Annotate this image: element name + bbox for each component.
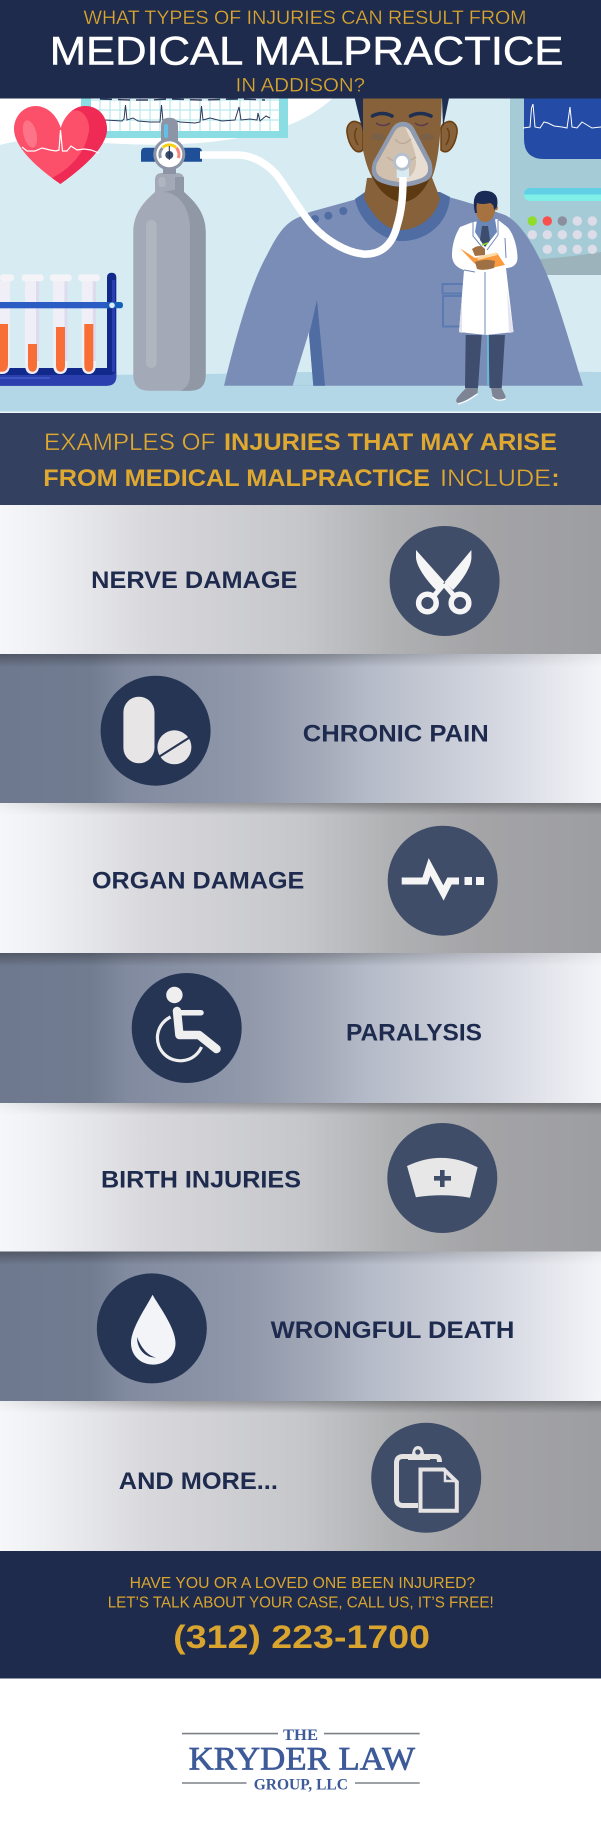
icon: pulse line xyxy=(388,826,498,936)
icon: drop xyxy=(97,1273,207,1383)
logo: The Kryder Law Group xyxy=(182,1727,420,1793)
call to action text: LET’S TALK ABOUT YOUR CASE, CALL US, IT’S FREE! xyxy=(108,1594,494,1611)
subheading line 1: EXAMPLES OF xyxy=(44,429,215,456)
subheading line 2: FROM MEDICAL MALPRACTICE xyxy=(43,465,430,492)
panel: wrongful death xyxy=(0,1252,601,1401)
label: PARALYSIS xyxy=(346,1021,482,1047)
sweater xyxy=(224,195,583,386)
logo: The Kryder Law Group: GROUP, LLC xyxy=(254,1776,348,1793)
title line 2: MEDICAL MALPRACTICE xyxy=(50,29,563,73)
phone number: (312) 223-1700 xyxy=(173,1619,430,1655)
hands and pen xyxy=(472,246,495,270)
title line 3: IN ADDISON? xyxy=(236,74,365,96)
rack bar xyxy=(0,302,112,308)
rack frame xyxy=(0,273,116,386)
label: BIRTH INJURIES xyxy=(101,1167,301,1193)
ears xyxy=(347,121,457,152)
trousers xyxy=(465,335,505,388)
subheading line 1: INJURIES THAT MAY ARISE xyxy=(224,429,557,456)
book xyxy=(460,248,505,270)
ECG monitor on wall xyxy=(81,98,288,138)
heart with ECG line xyxy=(14,106,107,184)
equipment panel xyxy=(510,98,601,275)
valve handle xyxy=(141,148,202,162)
floor xyxy=(0,371,601,413)
panel: paralysis xyxy=(0,953,601,1103)
panel: chronic pain xyxy=(0,654,601,803)
icon: nurse cap xyxy=(387,1123,497,1233)
call to action banner xyxy=(0,1551,601,1678)
white wall patch xyxy=(0,98,333,145)
title banner xyxy=(0,0,601,98)
test tube 2 xyxy=(22,274,44,374)
label: AND MORE... xyxy=(119,1469,278,1495)
patient xyxy=(224,90,583,386)
subheading line 2: INCLUDE xyxy=(440,465,551,492)
icon: wheelchair xyxy=(132,973,242,1083)
oxygen mask xyxy=(372,122,432,187)
panel: organ damage xyxy=(0,803,601,953)
label: WRONGFUL DEATH xyxy=(271,1318,514,1344)
icon: scissors xyxy=(390,526,500,636)
hair xyxy=(354,98,449,132)
room wall xyxy=(0,98,601,375)
chin shadow xyxy=(372,176,431,202)
face xyxy=(363,98,442,178)
title line 1: WHAT TYPES OF INJURIES CAN RESULT FROM xyxy=(84,7,526,29)
blue screen with ECG xyxy=(523,98,601,159)
sleeve shadow xyxy=(309,300,325,386)
icon: pills xyxy=(101,676,211,786)
cheeks xyxy=(371,134,385,140)
test tube 1 xyxy=(0,274,14,374)
call to action text xyxy=(108,1575,494,1611)
indicator dots xyxy=(528,216,597,254)
subheading line 2: : xyxy=(552,465,560,492)
logo: The Kryder Law Group: KRYDER LAW xyxy=(189,1741,416,1777)
panel: and more xyxy=(0,1401,601,1551)
label: ORGAN DAMAGE xyxy=(92,869,304,895)
arm gap xyxy=(297,332,312,372)
pressure gauge xyxy=(153,138,185,170)
call to action text: HAVE YOU OR A LOVED ONE BEEN INJURED? xyxy=(130,1575,476,1592)
panel: nerve damage xyxy=(0,505,601,654)
label: CHRONIC PAIN xyxy=(303,722,489,748)
subheading banner xyxy=(0,413,601,505)
neck xyxy=(364,175,440,230)
label: NERVE DAMAGE xyxy=(91,568,297,594)
shirt and tie xyxy=(475,215,497,247)
subheading line 1 xyxy=(44,429,557,456)
lab coat xyxy=(452,219,518,335)
pocket xyxy=(442,284,463,326)
oxygen tube xyxy=(200,155,403,254)
test tube rack xyxy=(0,273,123,386)
shoulder buttons xyxy=(311,207,347,223)
test tube 4 xyxy=(78,274,100,374)
doctor xyxy=(452,191,518,404)
test tube 3 xyxy=(50,274,72,374)
panel: birth injuries xyxy=(0,1103,601,1252)
icon: clipboard xyxy=(371,1423,481,1533)
indicator bar xyxy=(524,188,601,201)
closed eyes xyxy=(376,123,428,126)
eyebrows xyxy=(372,114,431,116)
oxygen cylinder xyxy=(133,118,206,391)
head xyxy=(476,200,495,222)
valve stem xyxy=(161,118,178,141)
hair xyxy=(474,191,498,213)
illustration: oxygen patient scene xyxy=(0,90,601,413)
logo: The Kryder Law Group: THE xyxy=(283,1727,318,1744)
collar xyxy=(355,192,450,241)
shoes xyxy=(456,388,478,403)
